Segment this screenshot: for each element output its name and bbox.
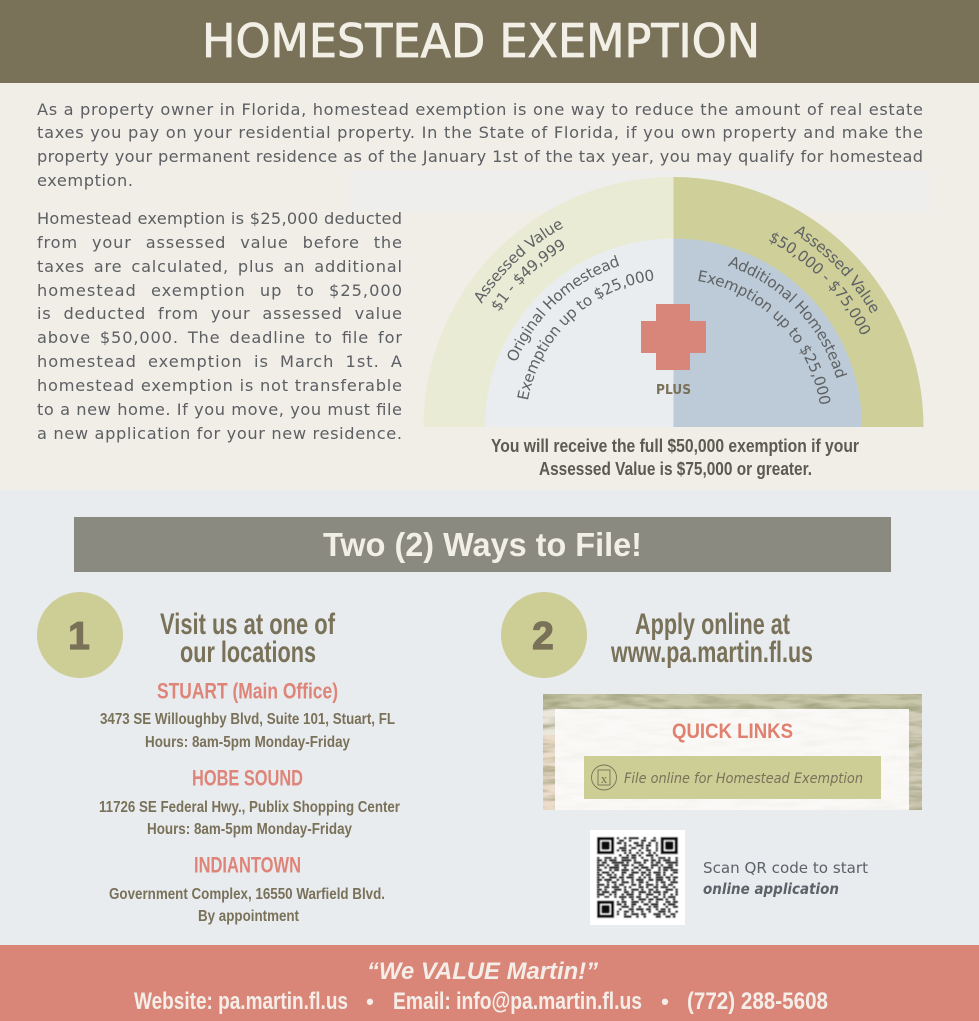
location: Indiantown: By appointment [198,908,300,925]
icon: document circle [592,765,616,790]
section banner [74,517,891,572]
left column paragraph: homestead exemption up to $25,000 [37,281,402,300]
inner arc: original exemption [485,238,674,427]
contact line: • [366,989,374,1014]
left column paragraph: to a new home. If you move, you must file [37,400,402,419]
contact line: Website: pa.martin.fl.us [134,988,348,1015]
diagram caption: You will receive the full $50,000 exemption if your [491,436,859,456]
location: Stuart: STUART (Main Office) [157,678,338,704]
heading: apply online: www.pa.martin.fl.us [610,636,813,669]
label: exemption up to right: Exemption up to $25,000 [698,270,830,404]
left column paragraph: taxes are calculated, plus an additional [37,257,402,276]
intro paragraph [37,100,923,190]
title banner [0,0,979,83]
button: file online: File online for Homestead Exemption [624,771,863,787]
label: assessed value left: Assessed Value [474,221,563,304]
label: assessed range left: $1 - $49,999 [492,240,564,311]
option 2: apply online [501,592,922,925]
contact line: • [661,989,669,1014]
diagram caption: Assessed Value is $75,000 or greater. [539,459,812,479]
number badge 1: 1 [68,615,90,658]
heading: quick links: QUICK LINKS [672,720,793,743]
icon: plus cross [641,304,706,370]
semicircle diagram [424,177,924,427]
intro paragraph: property your permanent residence as of the January 1st of the tax year, you may qualify for homestead [37,147,923,166]
location: Stuart [100,678,395,751]
location: Stuart: Hours: 8am-5pm Monday-Friday [145,734,350,751]
location: Indiantown: INDIANTOWN [194,852,301,878]
contact line: (772) 288-5608 [687,988,828,1015]
location: Hobe Sound [99,766,400,838]
label: assessed value right: Assessed Value [794,226,878,314]
button: file online [584,756,881,799]
heading: visit us: Visit us at one of [160,608,336,641]
QR caption [703,859,868,898]
QR caption: online application [703,880,839,898]
left column paragraph: from your assessed value before the [37,233,402,252]
number badge 2: 2 [532,615,554,658]
icon: document circle: x [601,771,608,786]
title banner: HOMESTEAD EXEMPTION [202,14,760,68]
location: Hobe Sound: Hours: 8am-5pm Monday-Friday [147,821,352,838]
outer arc: assessed value up to 49,999 [424,177,674,427]
heading: apply online [610,608,813,669]
left column paragraph: homestead exemption is not transferable [37,376,402,395]
location: Indiantown: Government Complex, 16550 Warfield Blvd. [109,886,385,903]
location: Stuart: 3473 SE Willoughby Blvd, Suite 101, Stuart, FL [100,711,395,728]
contact line [134,988,828,1015]
footer [0,945,979,1021]
outer arc: assessed value 50,000 to 75,000 [674,177,924,427]
left column paragraph: is deducted from your assessed value [37,304,402,323]
left column paragraph: above $50,000. The deadline to file for [37,328,402,347]
beach grass photo background [543,694,922,810]
diagram caption [491,436,859,479]
QR caption: Scan QR code to start [703,859,868,877]
intro paragraph: taxes you pay on your residential property. In the State of Florida, if you own property and make the [37,123,923,142]
intro paragraph: exemption. [37,171,133,190]
location: Hobe Sound: HOBE SOUND [192,766,303,790]
label: additional homestead: Additional Homestead [728,256,848,378]
left column paragraph: a new application for your new residence. [37,424,402,443]
option 1: visit locations [37,592,400,925]
intro paragraph: As a property owner in Florida, homestead exemption is one way to reduce the amount of real estate [37,100,923,119]
QR code [590,830,685,925]
location: Indiantown [109,852,385,925]
heading: apply online: Apply online at [635,608,790,641]
heading: visit us: our locations [180,636,316,669]
label: exemption up to left: Exemption up to $25,000 [517,270,654,400]
slogan: “We VALUE Martin!” [367,958,598,985]
number badge 2 [501,592,587,678]
left column paragraph: homestead exemption is March 1st. A [37,352,402,371]
heading: visit us [160,608,336,669]
panel: quick links [543,694,922,810]
left column paragraph: Homestead exemption is $25,000 deducted [37,209,402,228]
label: plus: PLUS [656,383,691,398]
section banner: Two (2) Ways to File! [323,526,642,563]
number badge 1 [37,592,123,678]
left column paragraph [37,209,402,443]
label: original homestead: Original Homestead [508,255,620,360]
label: assessed range right: $50,000 - $75,000 [769,232,870,334]
contact line: Email: info@pa.martin.fl.us [393,988,642,1015]
location: Hobe Sound: 11726 SE Federal Hwy., Publix Shopping Center [99,799,400,816]
inner arc: additional exemption [674,238,862,427]
